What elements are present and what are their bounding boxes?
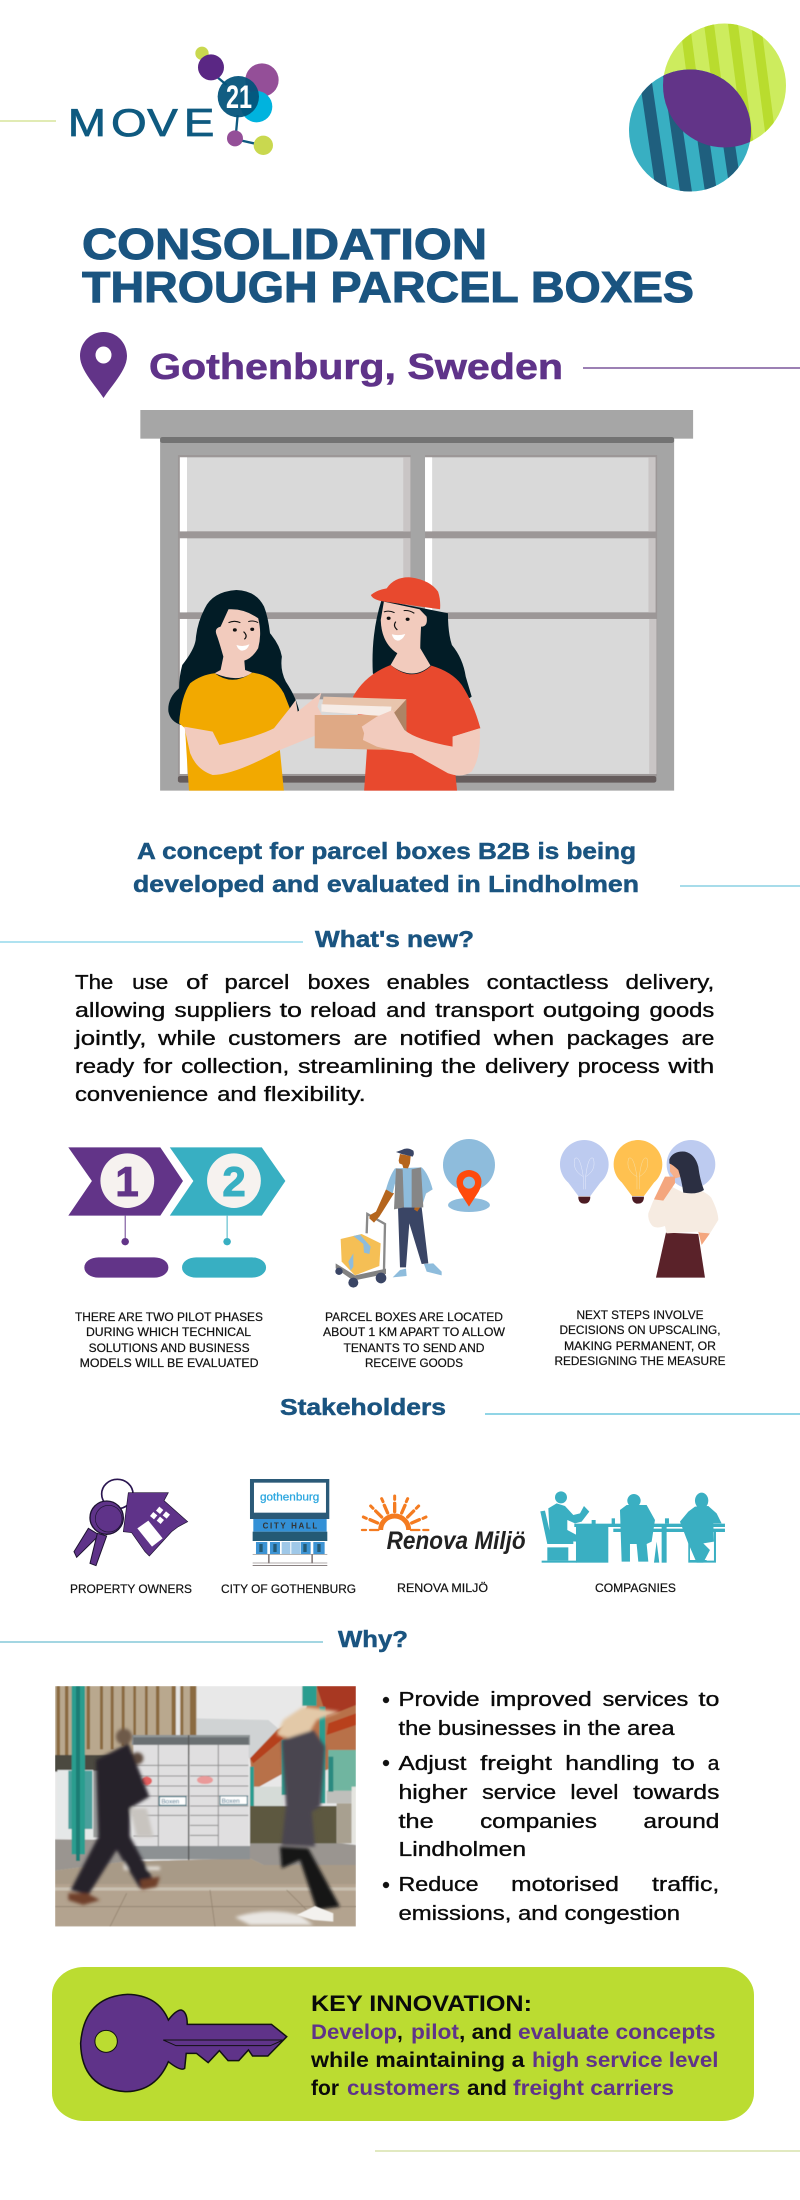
key innovation text: KEY INNOVATION: — [311, 1991, 532, 2016]
bullet 1: the businesses in the area — [398, 1718, 676, 1740]
text block: what's new paragraph: the — [441, 1056, 476, 1078]
title — [82, 220, 694, 312]
location heading: Gothenburg, Sweden — [149, 346, 563, 387]
illustration: woman thinking with light bulbs — [560, 1140, 718, 1278]
lockers — [132, 1735, 250, 1745]
key innovation text: high service level — [532, 2049, 718, 2072]
bullet 2 — [383, 1753, 720, 1861]
parcel box — [315, 697, 406, 750]
logo: Renova Miljö: Renova Miljö — [387, 1527, 526, 1555]
text block: what's new paragraph: delivery, — [626, 972, 714, 994]
woman — [648, 1152, 718, 1278]
bullet 2: Adjust — [398, 1753, 467, 1775]
label: Renova Miljö: RENOVA MILJÖ — [397, 1581, 488, 1595]
caption: next steps — [554, 1310, 726, 1368]
bullet 2: service — [482, 1782, 556, 1804]
text block: what's new paragraph: to — [280, 1000, 302, 1022]
man — [369, 1148, 442, 1277]
bullet 3: emissions, and congestion — [398, 1903, 680, 1925]
bullet 1 — [383, 1689, 719, 1740]
heading: What's new?: What's new? — [315, 926, 474, 952]
text block: what's new paragraph: reload — [310, 1000, 376, 1022]
text block: what's new paragraph: allowing — [75, 1000, 165, 1022]
bullet 3 — [383, 1874, 719, 1925]
key innovation text: , — [397, 2021, 403, 2044]
blurred passers-by — [68, 1707, 340, 1925]
icon: city hall: CITY HALL — [263, 1521, 317, 1530]
illustration: courier with cart and map pin — [335, 1139, 495, 1288]
icon: location pin — [80, 332, 127, 398]
text block: what's new paragraph: ready — [75, 1056, 134, 1078]
icon: two pilot phases chevrons — [68, 1147, 285, 1278]
caption: next steps: MAKING PERMANENT, OR — [564, 1341, 716, 1353]
bullet 2: to — [672, 1753, 695, 1775]
logo: Move21: 21 — [226, 79, 252, 115]
bullet 3: traffic, — [652, 1874, 719, 1896]
woman courier — [353, 577, 480, 791]
key innovation text: Develop — [311, 2021, 397, 2044]
caption: parcel box location: PARCEL BOXES ARE LOCATED — [325, 1312, 503, 1324]
text block: what's new paragraph: goods — [650, 1000, 714, 1022]
bullet 2: towards — [633, 1782, 719, 1804]
caption: pilot phases: THERE ARE TWO PILOT PHASES — [75, 1312, 263, 1324]
text block: what's new paragraph: convenience — [75, 1084, 208, 1106]
text block: what's new paragraph — [74, 972, 714, 1106]
bullet 2: handling — [565, 1753, 659, 1775]
text block: what's new paragraph: suppliers — [174, 1000, 271, 1022]
caption: pilot phases — [75, 1312, 263, 1370]
right building — [250, 1686, 356, 1790]
title: CONSOLIDATION — [82, 220, 487, 269]
photo: parcel box lockers with passers-by: Boxen — [222, 1798, 240, 1805]
text block: what's new paragraph: boxes — [308, 972, 370, 994]
subheading: concept statement: A concept for parcel boxes B2B is being — [137, 838, 636, 864]
window frame — [140, 410, 693, 791]
text block: what's new paragraph: and — [386, 1000, 426, 1022]
bullet 3: motorised — [511, 1874, 619, 1896]
caption: pilot phases: DURING WHICH TECHNICAL — [86, 1327, 252, 1339]
text block: what's new paragraph: The — [75, 972, 113, 994]
subheading: concept statement: developed and evaluated in Lindholmen — [133, 871, 639, 897]
text block: what's new paragraph: while — [157, 1028, 216, 1050]
text block: what's new paragraph: contactless — [487, 972, 609, 994]
label: city of Gothenburg: CITY OF GOTHENBURG — [221, 1582, 356, 1596]
photo: parcel box lockers with passers-by: Boxen — [161, 1799, 180, 1806]
bullet 1: services — [603, 1689, 688, 1711]
key innovation text: while maintaining a — [310, 2049, 525, 2072]
icon: two pilot phases chevrons: 2 — [222, 1158, 246, 1205]
text block: what's new paragraph: customers — [228, 1028, 341, 1050]
text block: what's new paragraph: for — [143, 1056, 173, 1078]
caption: parcel box location: TENANTS TO SEND AND — [344, 1343, 484, 1355]
text block: what's new paragraph: delivery — [485, 1056, 569, 1078]
decoration: overlapping striped circles — [629, 24, 786, 192]
heading: Why?: Why? — [338, 1626, 408, 1652]
text block: what's new paragraph: when — [493, 1028, 554, 1050]
text block: what's new paragraph: flexibility. — [264, 1084, 366, 1106]
icon: house keys — [74, 1479, 188, 1566]
light bulbs — [560, 1140, 715, 1204]
key innovation text — [310, 1991, 718, 2100]
text block: what's new paragraph: notified — [400, 1028, 481, 1050]
bullet 2: companies — [480, 1811, 597, 1833]
text block: what's new paragraph: outgoing — [543, 1000, 640, 1022]
caption: parcel box location — [323, 1312, 505, 1370]
bullet 2: around — [643, 1811, 719, 1833]
woman customer — [168, 590, 325, 791]
text block: what's new paragraph: packages — [567, 1028, 669, 1050]
title: THROUGH PARCEL BOXES — [82, 263, 694, 312]
photo: parcel box lockers with passers-by — [55, 1686, 357, 1927]
subheading: concept statement — [133, 838, 639, 897]
heading: Stakeholders: Stakeholders — [280, 1394, 446, 1420]
text block: what's new paragraph: of — [186, 972, 208, 994]
key innovation text: , and — [459, 2021, 512, 2044]
text block: what's new paragraph: parcel — [224, 972, 289, 994]
logo: Renova Miljö — [362, 1496, 526, 1555]
list: reasons — [383, 1689, 720, 1925]
text block: what's new paragraph: and — [217, 1084, 257, 1106]
background — [55, 1686, 356, 1861]
key innovation text: evaluate concepts — [518, 2021, 716, 2044]
bullet 1: Provide — [398, 1689, 480, 1711]
caption: pilot phases: SOLUTIONS AND BUSINESS — [89, 1343, 250, 1355]
text block: what's new paragraph: collection, — [181, 1056, 289, 1078]
bullet 3: Reduce — [398, 1874, 479, 1896]
text block: what's new paragraph: are — [682, 1028, 714, 1050]
label: property owners: PROPERTY OWNERS — [70, 1582, 192, 1596]
icon: city hall — [250, 1479, 329, 1566]
caption: pilot phases: MODELS WILL BE EVALUATED — [80, 1358, 259, 1370]
text block: what's new paragraph: jointly, — [74, 1028, 146, 1050]
label: companies: COMPAGNIES — [595, 1581, 676, 1595]
panel: key innovation — [52, 1967, 754, 2121]
key innovation text: freight carriers — [513, 2077, 674, 2100]
text block: what's new paragraph: enables — [387, 972, 469, 994]
caption: next steps: NEXT STEPS INVOLVE — [576, 1310, 704, 1322]
courier arm and hands — [362, 710, 480, 775]
text block: what's new paragraph: with — [667, 1056, 714, 1078]
bullet 2: Lindholmen — [398, 1839, 526, 1861]
text block: what's new paragraph: process — [578, 1056, 660, 1078]
icon: companies meeting silhouettes — [540, 1491, 725, 1563]
text block: what's new paragraph: streamlining — [298, 1056, 433, 1078]
text block: what's new paragraph: are — [354, 1028, 387, 1050]
icon: key — [81, 1994, 287, 2092]
icon: city hall: gothenburg — [260, 1492, 319, 1504]
key innovation text: for — [311, 2077, 339, 2100]
text block: what's new paragraph: transport — [435, 1000, 534, 1022]
teal column — [72, 1686, 85, 1854]
cart with box — [335, 1214, 386, 1288]
caption: next steps: REDESIGNING THE MEASURE — [554, 1356, 726, 1368]
bullet 1: to — [698, 1689, 719, 1711]
icon: two pilot phases chevrons: 1 — [115, 1158, 139, 1205]
caption: parcel box location: RECEIVE GOODS — [365, 1358, 463, 1370]
key innovation text: customers — [347, 2077, 460, 2100]
bullet 2: higher — [398, 1782, 468, 1804]
caption: next steps: DECISIONS ON UPSCALING, — [560, 1325, 720, 1337]
logo: Move21: MOVE — [68, 101, 214, 144]
key innovation text: pilot — [411, 2021, 459, 2044]
map pin — [443, 1139, 495, 1212]
bullet 2: a — [708, 1753, 720, 1775]
caption: parcel box location: ABOUT 1 KM APART TO ALLOW — [323, 1327, 505, 1339]
bullet 2: the — [398, 1811, 434, 1833]
bullet 2: freight — [480, 1753, 553, 1775]
bullet 2: level — [570, 1782, 618, 1804]
bullet 1: improved — [490, 1689, 592, 1711]
text block: what's new paragraph: use — [132, 972, 168, 994]
key innovation text: and — [467, 2077, 507, 2100]
logo: Move21 — [0, 47, 279, 155]
illustration: parcel hand-over at window — [140, 410, 693, 791]
